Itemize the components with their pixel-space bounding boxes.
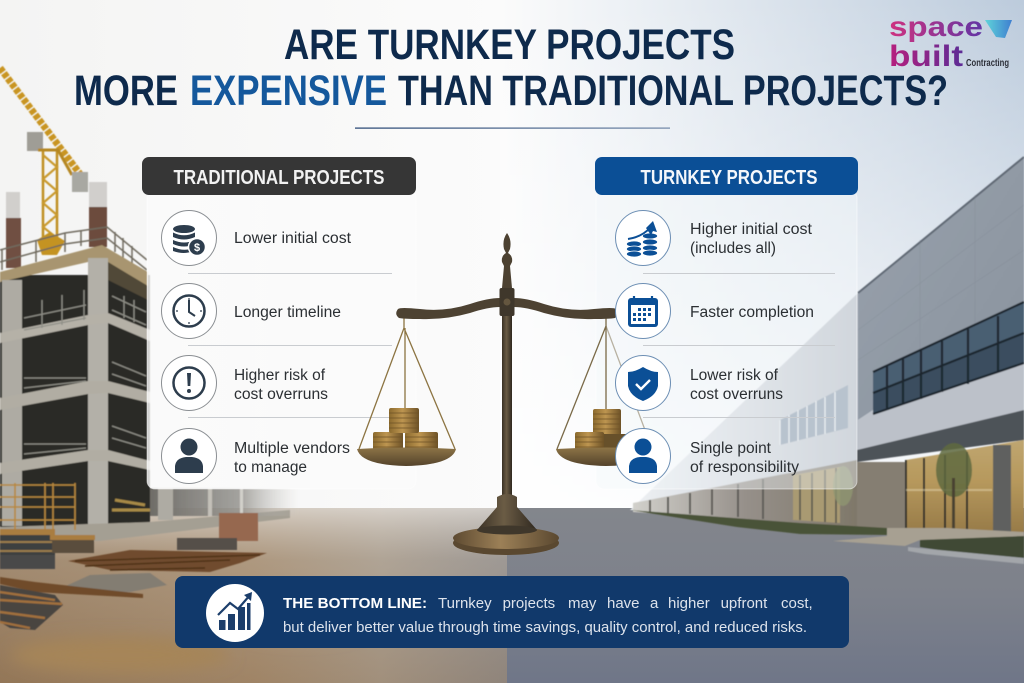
heading: traditional projects: [142, 157, 416, 195]
heading: turnkey projects: TURNKEY PROJECTS: [640, 167, 818, 189]
label: Higher initial cost: [690, 221, 813, 238]
title: ARE TURNKEY PROJECTS: [284, 21, 735, 69]
low left window band: [780, 385, 848, 445]
icon: clock: [162, 284, 216, 338]
callout text: projects: [503, 595, 555, 612]
light facade: [630, 293, 858, 510]
icon: coin stack with dollar: $: [194, 242, 200, 254]
pole: [502, 316, 512, 496]
panel: turnkey projects background: [596, 190, 857, 489]
canopy: [857, 410, 1024, 462]
icon: exclamation: [162, 356, 216, 410]
label: Lower risk of: [690, 367, 779, 384]
callout text: higher: [668, 595, 710, 612]
left pan: [357, 448, 456, 466]
label: Lower initial cost: [234, 230, 352, 247]
item: faster completion: [616, 284, 814, 338]
right coins: [575, 409, 628, 455]
item: higher initial cost: (includes all): [690, 240, 776, 257]
item: higher risk: cost overruns: [234, 386, 328, 403]
callout text: a: [650, 595, 659, 612]
item: lower risk: cost overruns: [690, 386, 783, 403]
icon: person: [616, 428, 670, 484]
rebar columns and parapet: [0, 182, 147, 270]
item: single point: [616, 428, 799, 484]
label: Longer timeline: [234, 304, 341, 321]
title rule: [355, 128, 670, 129]
right hanging strings: [557, 317, 645, 449]
callout: the bottom line: but deliver better value through time savings, quality control, and reduced risks.: [283, 619, 807, 636]
logo: space built contracting: [889, 11, 1012, 73]
right pan: [556, 448, 656, 466]
icon: person: [162, 428, 216, 484]
crane: [0, 68, 88, 255]
hedges and road edge: [833, 528, 1024, 546]
distant frame fading out: [150, 488, 300, 520]
logo: space built contracting: built: [889, 40, 963, 73]
icon: chart in circle: [206, 584, 264, 642]
logo: space built contracting: Contracting: [966, 57, 1009, 69]
callout text: Turnkey: [438, 595, 492, 612]
beam: [396, 298, 500, 319]
icon: rising coins: [616, 210, 670, 266]
list: traditional projects: [162, 210, 352, 484]
item: higher initial cost: [616, 210, 813, 266]
left coins: [373, 408, 438, 455]
white haze fade between building and centre: [150, 196, 310, 488]
item: multiple vendors: to manage: [234, 459, 307, 476]
photo: construction site under construction: [0, 68, 300, 630]
balance scale with coins: [357, 233, 656, 555]
concrete frame: [0, 245, 290, 541]
trees: [833, 443, 972, 536]
title: MORE: [74, 67, 178, 115]
item: higher risk: [162, 356, 328, 410]
callout: the bottom line: [175, 576, 849, 648]
finial and hub: [502, 233, 512, 288]
item: multiple vendors: [162, 428, 350, 484]
icon: coin stack with dollar: [162, 210, 216, 266]
heading: turnkey projects: [595, 157, 858, 195]
title: [74, 21, 948, 115]
icon: shield: [616, 356, 670, 410]
item: lower initial cost: [162, 210, 352, 266]
title: EXPENSIVE: [190, 67, 387, 115]
storefront: [857, 462, 906, 528]
label: Faster completion: [690, 304, 814, 321]
callout text: upfront: [721, 595, 768, 612]
dark upper facade: [858, 157, 1024, 420]
high window band: [873, 302, 1024, 414]
callout text: THE BOTTOM LINE:: [283, 595, 427, 612]
item: longer timeline: [162, 284, 341, 338]
label: Single point: [690, 440, 772, 457]
callout text: have: [607, 595, 640, 612]
label: Multiple vendors: [234, 440, 350, 457]
left hanging strings: [359, 317, 455, 449]
logo: space built contracting: space: [889, 11, 983, 42]
icon: calendar: [616, 284, 670, 338]
item: lower risk: [616, 356, 783, 410]
label: Higher risk of: [234, 367, 326, 384]
photo: finished commercial building: [630, 157, 1024, 564]
left storefront run: [633, 460, 857, 528]
stand base: [477, 494, 537, 530]
panel: traditional projects background: [147, 190, 416, 489]
list: turnkey projects: [616, 210, 814, 484]
heading: traditional projects: TRADITIONAL PROJECTS: [174, 167, 384, 189]
callout text: may: [568, 595, 597, 612]
item: single point: of responsibility: [690, 459, 799, 476]
callout text: cost,: [781, 595, 813, 612]
scaffold and material stacks: [0, 483, 267, 630]
